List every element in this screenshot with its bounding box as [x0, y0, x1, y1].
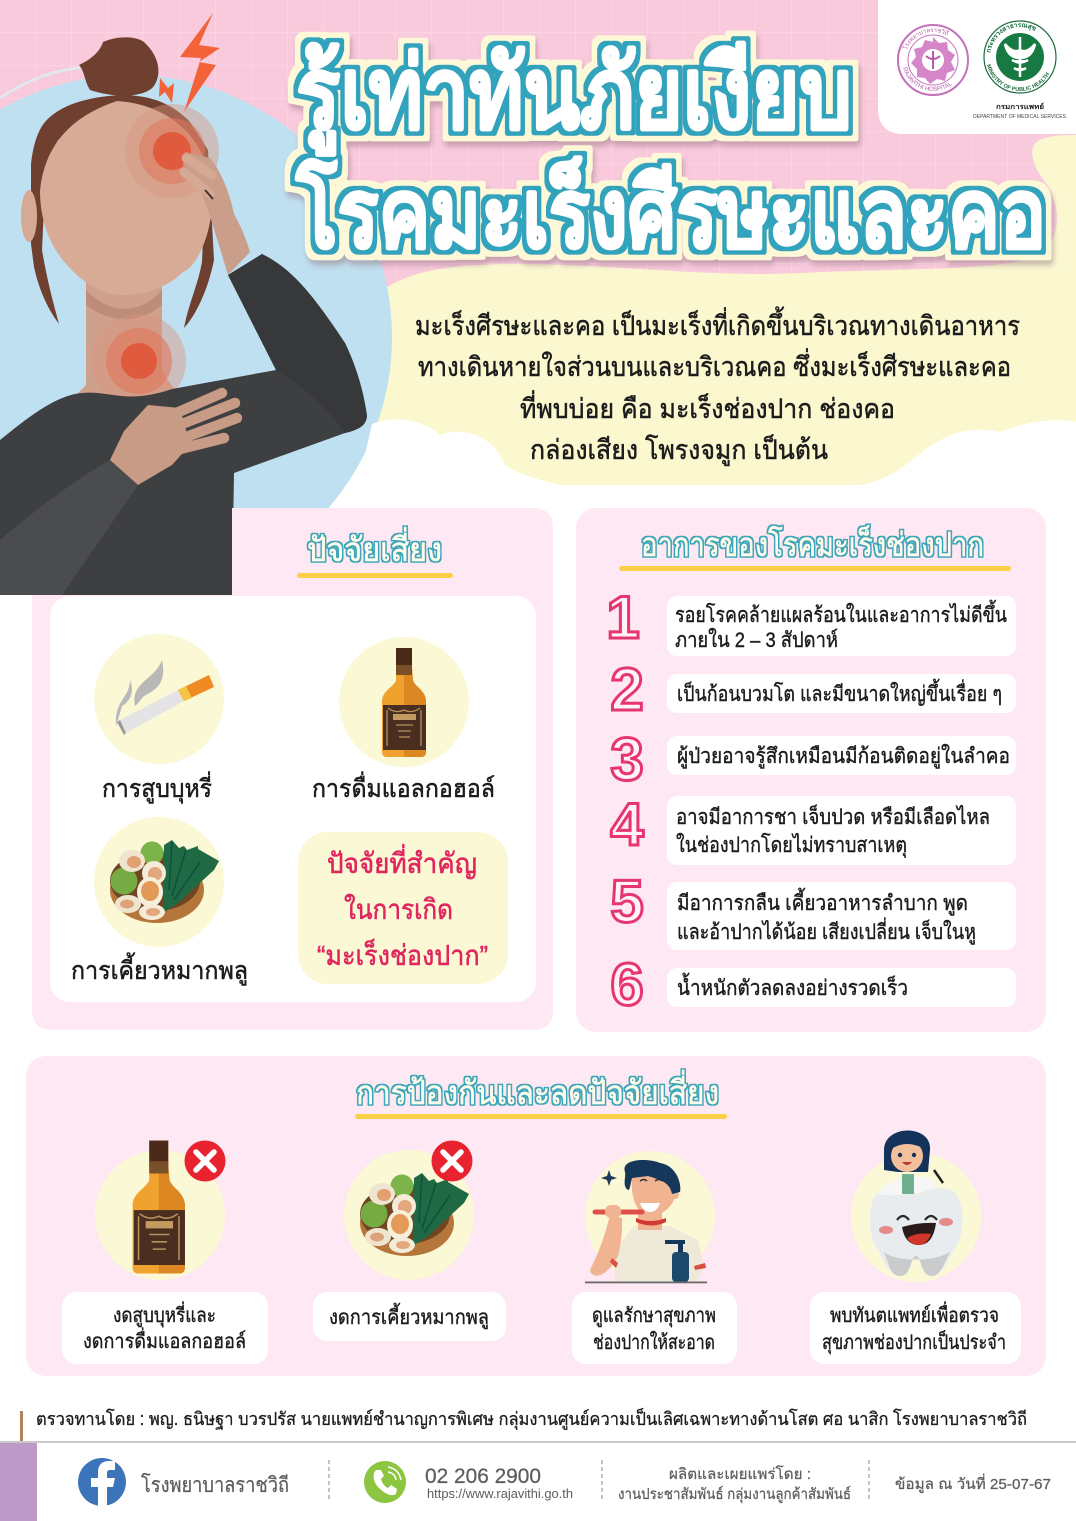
factor: betel nut: การเคี้ยวหมากพลู	[71, 952, 248, 986]
neck pain rings	[92, 314, 186, 408]
prevention: no betel nut	[313, 1140, 506, 1341]
symptom 6: 6	[610, 951, 644, 1018]
cloud band	[350, 420, 1076, 520]
callout: key factor: “มะเร็งช่องปาก”	[317, 938, 488, 971]
logo: Ministry of Public Health: MINISTRY OF PUBLIC HEALTH	[987, 64, 1050, 91]
logo: Rajavithi Hospital: RAJAVITHI HOSPITAL	[903, 67, 952, 91]
symptom 1: รอยโรคคล้ายแผลร้อนในและอาการไม่ดีขึ้น	[675, 600, 1007, 627]
factor: betel nut	[71, 817, 248, 986]
head pain rings	[125, 104, 219, 198]
prevention: oral hygiene: ช่องปากให้สะอาด	[593, 1331, 715, 1354]
symptom 2	[610, 656, 1016, 723]
logo: Rajavithi Hospital	[897, 24, 969, 96]
symptom 5: 5	[610, 868, 644, 935]
symptom 4: 4	[610, 791, 644, 858]
prevention: dental checkup	[810, 1130, 1021, 1364]
hair bun and hair	[31, 37, 214, 328]
factor: smoking: การสูบบุหรี่	[102, 771, 212, 804]
reviewer credit	[20, 1407, 1027, 1443]
symptom 2: เป็นก้อนบวมโต และมีขนาดใหญ่ขึ้นเรื่อย ๆ	[677, 679, 1002, 706]
raised hand	[183, 152, 250, 275]
footer: โรงพยาบาลราชวิถี	[141, 1473, 289, 1497]
symptom 3: ผู้ป่วยอาจรู้สึกเหมือนมีก้อนติดอยู่ในลำคอ	[677, 744, 1010, 769]
logo: Ministry of Public Health	[973, 20, 1067, 120]
symptom 3	[610, 726, 1016, 793]
logo: Ministry of Public Health: กรมการแพทย์	[996, 102, 1044, 111]
panel: prevention	[26, 1056, 1046, 1376]
neck	[60, 275, 180, 470]
symptom 4: ในช่องปากโดยไม่ทราบสาเหตุ	[676, 833, 907, 858]
footer	[0, 1441, 1076, 1521]
callout: key factor	[298, 832, 508, 984]
prevention: dental checkup: พบทันตแพทย์เพื่อตรวจ	[830, 1301, 999, 1327]
icon: phone	[364, 1461, 406, 1503]
callout: key factor: ในการเกิด	[344, 893, 453, 925]
intro text: ทางเดินหายใจส่วนบนและบริเวณคอ ซึ่งมะเร็งศีรษะและคอ	[418, 348, 1011, 382]
logo card	[878, 0, 1076, 134]
footer: ผลิตและเผยแพร่โดย :	[669, 1465, 811, 1483]
symptom 1: 1	[606, 584, 640, 651]
heading: symptoms: อาการของโรคมะเร็งช่องปาก	[641, 525, 984, 563]
icon: facebook	[78, 1458, 126, 1506]
symptom 5: มีอาการกลืน เคี้ยวอาหารลำบาก พูด	[677, 888, 968, 916]
symptom 1	[606, 584, 1016, 656]
intro text: ที่พบบ่อย คือ มะเร็งช่องปาก ช่องคอ	[520, 390, 895, 424]
symptom 5	[610, 868, 1016, 950]
heading: risk factors: ปัจจัยเสี่ยง	[307, 527, 442, 568]
intro text: กล่องเสียง โพรงจมูก เป็นต้น	[530, 432, 828, 466]
illustration: woman with head and neck pain	[0, 13, 367, 595]
heading: prevention: การป้องกันและลดปัจจัยเสี่ยง	[356, 1070, 719, 1111]
symptom 1: ภายใน 2 – 3 สัปดาห์	[675, 628, 838, 652]
symptom 6: น้ำหนักตัวลดลงอย่างรวดเร็ว	[677, 973, 908, 1000]
factor: smoking	[94, 634, 224, 804]
intro text	[415, 306, 1020, 466]
factor: alcohol: การดื่มแอลกอฮอล์	[312, 771, 495, 803]
symptom 3: 3	[610, 726, 644, 793]
logo: Ministry of Public Health: กระทรวงสาธารณสุข	[986, 23, 1036, 53]
prevention: no betel nut: งดการเคี้ยวหมากพลู	[329, 1303, 489, 1330]
prevention: oral hygiene	[572, 1151, 737, 1364]
symptom 2: 2	[610, 656, 644, 723]
factor: alcohol	[312, 637, 495, 803]
face	[40, 101, 212, 295]
lightning bolts	[159, 13, 220, 112]
symptom 4: อาจมีอาการชา เจ็บปวด หรือมีเลือดไหล	[676, 803, 990, 829]
symptom 6	[610, 951, 1016, 1018]
panel: risk factors	[32, 508, 553, 1030]
symptom 5: และอ้าปากได้น้อย เสียงเปลี่ยน เจ็บในหู	[677, 917, 976, 945]
prevention: no smoking and alcohol: งดการดื่มแอลกอฮอล์	[83, 1327, 246, 1353]
ear	[21, 190, 37, 242]
prevention: dental checkup: สุขภาพช่องปากเป็นประจำ	[822, 1329, 1006, 1355]
title	[295, 38, 1046, 268]
prevention: no smoking and alcohol	[62, 1140, 268, 1364]
prevention: no smoking and alcohol: งดสูบบุหรี่และ	[113, 1301, 216, 1328]
footer: งานประชาสัมพันธ์ กลุ่มงานลูกค้าสัมพันธ์	[618, 1486, 851, 1504]
title: รู้เท่าทันภัยเงียบ	[296, 38, 852, 156]
hand on chest	[110, 393, 237, 485]
symptom 4	[610, 791, 1016, 865]
footer: ข้อมูล ณ วันที่ 25-07-67	[895, 1473, 1051, 1493]
callout: key factor: ปัจจัยที่สำคัญ	[327, 844, 477, 879]
logo: Ministry of Public Health: DEPARTMENT OF MEDICAL SERVICES	[973, 114, 1067, 120]
logo: Rajavithi Hospital: โรงพยาบาลราชวิถี	[902, 28, 949, 48]
prevention: oral hygiene: ดูแลรักษาสุขภาพ	[592, 1305, 716, 1328]
sweater	[0, 254, 367, 595]
panel: symptoms	[576, 508, 1046, 1032]
footer: 02 206 2900	[425, 1465, 541, 1488]
footer: https://www.rajavithi.go.th	[427, 1486, 573, 1501]
